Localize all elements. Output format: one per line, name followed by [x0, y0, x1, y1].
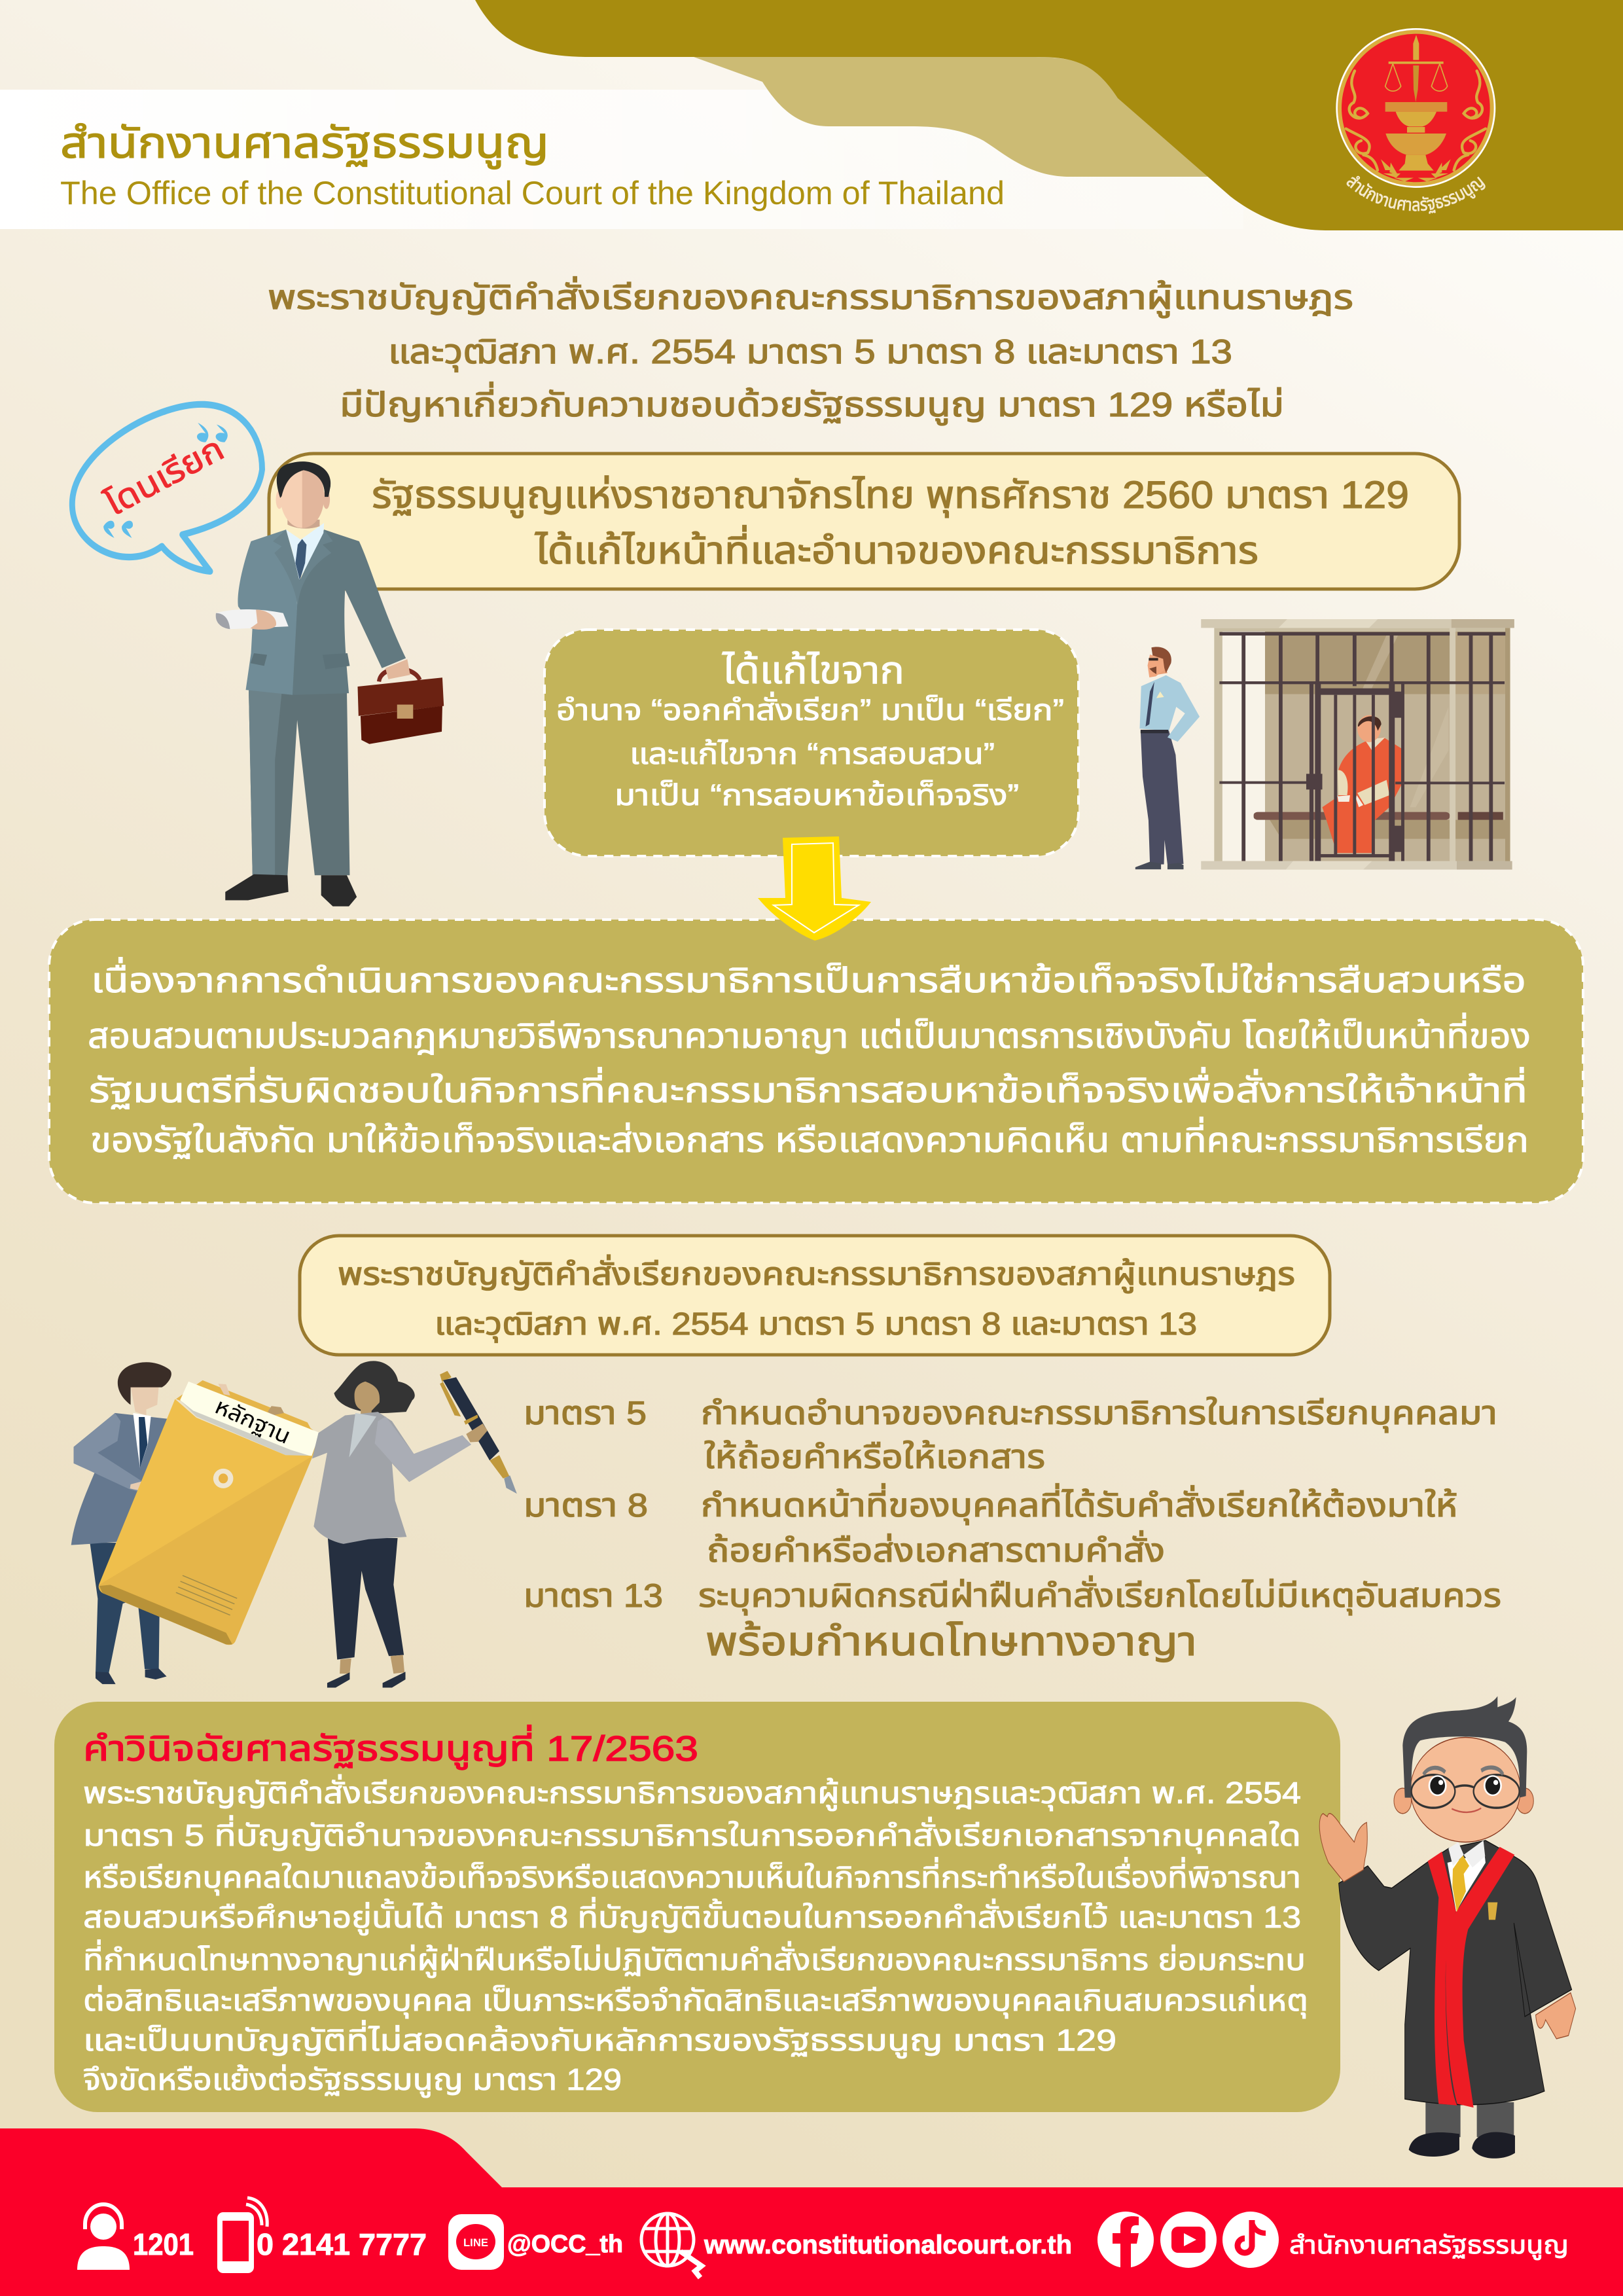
panel: explanation: [49, 920, 1583, 1203]
icon: LINE: [448, 2214, 504, 2270]
heading English: The Office of the Constitutional Court of the Kingdom of Thailand: [60, 175, 1005, 211]
panel: court ruling: หรือเรียกบุคคลใดมาแถลงข้อเท็จจริงหรือแสดงความเห็นในกิจการที่กระทำหรือในเรื่องที่พิจารณา: [83, 1857, 1301, 1895]
section 8: กำหนดหน้าที่ของบุคคลที่ได้รับคำสั่งเรียกให้ต้องมาให้: [701, 1483, 1457, 1525]
phone number: 0 2141 7777: [257, 2227, 427, 2261]
bars: [1219, 632, 1505, 861]
panel: act heading: [300, 1236, 1330, 1355]
panel: amended from: ได้แก้ไขจาก: [722, 649, 904, 692]
light gold ribbon: [694, 57, 1230, 190]
panel: explanation: เนื่องจากการดำเนินการของคณะกรรมาธิการเป็นการสืบหาข้อเท็จจริงไม่ใช่การสืบสวนหรือ: [91, 957, 1526, 1000]
section 5: ให้ถ้อยคำหรือให้เอกสาร: [704, 1439, 1045, 1475]
panel: court ruling: ต่อสิทธิและเสรีภาพของบุคคล เป็นภาระหรือจำกัดสิทธิและเสรีภาพของบุคคลเกินสมควรแก่เหตุ: [83, 1983, 1308, 2018]
panel: amended from: [544, 630, 1079, 856]
website: www.constitutionalcourt.or.th: [704, 2231, 1072, 2259]
pen: [440, 1371, 452, 1382]
icon: youtube: [1160, 2212, 1217, 2268]
icon: court seal: [1336, 28, 1496, 214]
woman: [328, 1538, 404, 1660]
illustration: guard and prisoner in cell: [1135, 619, 1514, 870]
panel: constitution section 129: [269, 454, 1459, 589]
panel: court ruling: สอบสวนหรือศึกษาอยู่นั้นได้ มาตรา 8 ที่บัญญัติขั้นตอนในการออกคำสั่งเรียกไว้ และมาตรา 13: [83, 1897, 1301, 1935]
arrow: [758, 836, 871, 941]
title block: มีปัญหาเกี่ยวกับความชอบด้วยรัฐธรรมนูญ มาตรา 129 หรือไม่: [340, 382, 1284, 425]
dark gold wave: [475, 0, 1623, 230]
panel: court ruling: ที่กำหนดโทษทางอาญาแก่ผู้ฝ่าฝืนหรือไม่ปฏิบัติตามคำสั่งเรียกของคณะกรรมาธิการ ย่อมกระทบ: [83, 1939, 1306, 1978]
panel: court ruling: พระราชบัญญัติคำสั่งเรียกของคณะกรรมาธิการของสภาผู้แทนราษฎรและวุฒิสภา พ.ศ. 2554: [83, 1774, 1301, 1811]
panel: court ruling: มาตรา 5 ที่บัญญัติอำนาจของคณะกรรมาธิการในการออกคำสั่งเรียกเอกสารจากบุคคลใด: [83, 1815, 1301, 1854]
icon: speech bubble: [72, 404, 262, 571]
section 13: [524, 1575, 1501, 1664]
icon: phone: [217, 2198, 267, 2273]
section 5: มาตรา 5: [524, 1395, 647, 1431]
section 13: ระบุความผิดกรณีฝ่าฝืนคำสั่งเรียกโดยไม่มีเหตุอันสมควร: [698, 1575, 1501, 1615]
panel: court ruling: และเป็นบทบัญญัติที่ไม่สอดคล้องกับหลักการของรัฐธรรมนูญ มาตรา 129: [83, 2020, 1116, 2058]
panel: constitution section 129: ได้แก้ไขหน้าที่และอำนาจของคณะกรรมาธิการ: [535, 525, 1258, 572]
panel: explanation: สอบสวนตามประมวลกฎหมายวิธีพิจารณาความอาญา แต่เป็นมาตรการเชิงบังคับ โดยให้เป็นหน้าที่ของ: [88, 1013, 1531, 1056]
panel: court ruling: คำวินิจฉัยศาลรัฐธรรมนูญที่ 17/2563: [83, 1725, 698, 1770]
heading Thai: สำนักงานศาลรัฐธรรมนูญ: [60, 118, 549, 170]
footer: [0, 2128, 1623, 2296]
icon: LINE: LINE: [463, 2236, 488, 2249]
guard: [1141, 731, 1183, 865]
header: [0, 0, 1623, 230]
icon: tiktok: [1222, 2212, 1279, 2268]
illustration: judge in robe: [1319, 1696, 1576, 2159]
envelope label: หลักฐาน: [211, 1394, 294, 1449]
floor: [1201, 861, 1457, 870]
back flap: [176, 1380, 319, 1456]
section 13: พร้อมกำหนดโทษทางอาญา: [705, 1619, 1197, 1664]
white title band: [0, 90, 1243, 229]
envelope: [99, 1399, 313, 1645]
section 8: มาตรา 8: [524, 1487, 648, 1524]
office name: สำนักงานศาลรัฐธรรมนูญ: [1289, 2232, 1569, 2260]
panel: constitution section 129: รัฐธรรมนูญแห่งราชอาณาจักรไทย พุทธศักราช 2560 มาตรา 129: [372, 474, 1409, 518]
icon: website globe: [641, 2214, 702, 2278]
panel: court ruling: จึงขัดหรือแย้งต่อรัฐธรรมนูญ มาตรา 129: [83, 2062, 622, 2098]
panel: explanation: รัฐมนตรีที่รับผิดชอบในกิจการที่คณะกรรมาธิการสอบหาข้อเท็จจริงเพื่อสั่งการให้เจ้าหน้าที่: [89, 1067, 1527, 1110]
panel: amended from: มาเป็น “การสอบหาข้อเท็จจริง”: [615, 778, 1019, 812]
panel: act heading: พระราชบัญญัติคำสั่งเรียกของคณะกรรมาธิการของสภาผู้แทนราษฎร: [338, 1255, 1295, 1293]
panel: explanation: ของรัฐในสังกัด มาให้ข้อเท็จจริงและส่งเอกสาร หรือแสดงความคิดเห็น ตามที่คณะกรรมาธิการเรียก: [90, 1117, 1529, 1160]
sections list: [524, 1395, 1501, 1664]
title block: พระราชบัญญัติคำสั่งเรียกของคณะกรรมาธิการของสภาผู้แทนราษฎร: [268, 276, 1353, 318]
panel: act heading: และวุฒิสภา พ.ศ. 2554 มาตรา 5 มาตรา 8 และมาตรา 13: [435, 1307, 1197, 1343]
prisoner: [1323, 738, 1401, 853]
panel: amended from: อำนาจ “ออกคำสั่งเรียก” มาเป็น “เรียก”: [556, 692, 1064, 726]
panel: amended from: และแก้ไขจาก “การสอบสวน”: [630, 737, 995, 770]
title block: [268, 276, 1353, 425]
section 8: ถ้อยคำหรือส่งเอกสารตามคำสั่ง: [707, 1530, 1165, 1569]
bubble text: โดนเรียก: [99, 429, 230, 524]
section 5: [524, 1395, 1497, 1475]
section 8: [524, 1483, 1457, 1569]
phone number 1201: 1201: [133, 2227, 194, 2261]
red footer band: [0, 2128, 1623, 2296]
illustration: man in suit with briefcase: [216, 461, 444, 906]
seal caption: สำนักงานศาลรัฐธรรมนูญ: [1347, 175, 1486, 214]
title block: และวุฒิสภา พ.ศ. 2554 มาตรา 5 มาตรา 8 และมาตรา 13: [388, 333, 1232, 372]
illustration: two people with evidence envelope: [71, 1361, 517, 1688]
document: [180, 1382, 320, 1456]
LINE id: @OCC_th: [507, 2231, 623, 2258]
icon: call centre: [77, 2204, 130, 2270]
section 5: กำหนดอำนาจของคณะกรรมาธิการในการเรียกบุคคลมา: [701, 1395, 1497, 1433]
icon: facebook: [1097, 2212, 1154, 2268]
section 13: มาตรา 13: [524, 1577, 663, 1614]
panel: court ruling: [54, 1702, 1340, 2112]
